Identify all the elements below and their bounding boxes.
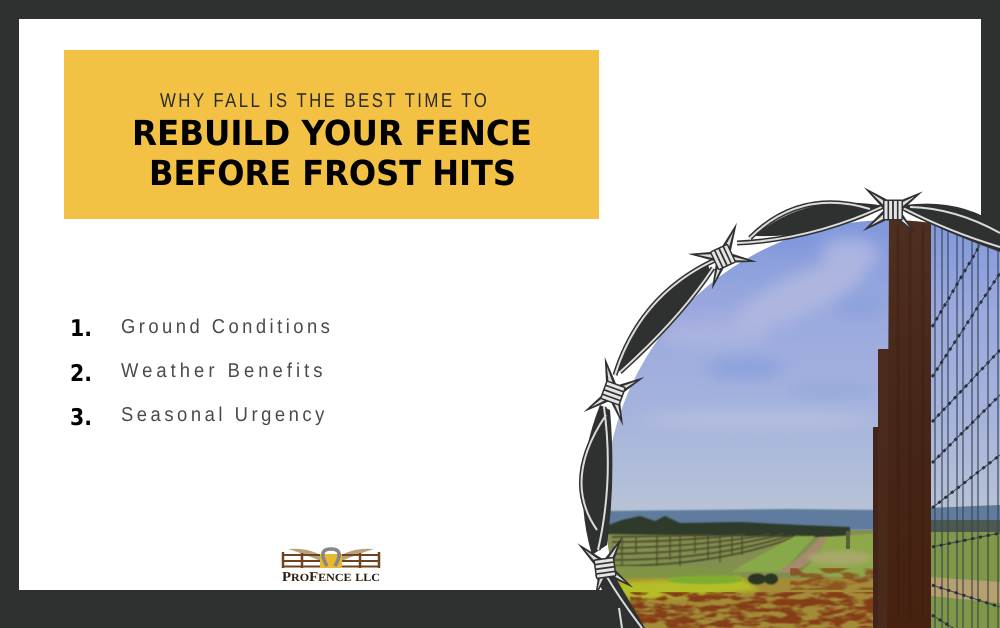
bright green patch <box>667 576 743 584</box>
item 3: Seasonal Urgency <box>121 404 324 426</box>
field base <box>608 530 873 578</box>
item 2: 2. <box>70 361 92 387</box>
distant hills <box>600 506 1000 530</box>
dirt strip behind fence <box>931 577 1000 603</box>
foreground base <box>600 578 880 628</box>
main fence post <box>887 215 931 628</box>
item 2: Weather Benefits <box>121 360 322 382</box>
pale meadow patch <box>808 551 872 565</box>
wire mesh <box>932 226 1000 628</box>
wire segment: upper left <box>615 260 715 375</box>
far fence post <box>873 427 879 628</box>
second fence post <box>878 349 888 628</box>
barb: upper left <box>687 220 758 292</box>
dark trees behind fence <box>931 520 1000 532</box>
right-hand field <box>797 533 873 578</box>
green strip <box>730 536 815 572</box>
tree line <box>600 516 850 537</box>
item 3 <box>70 404 324 431</box>
numbered list <box>70 316 330 431</box>
item 1: 1. <box>70 316 92 342</box>
logo icon: horns, fence, horseshoe <box>282 549 380 568</box>
item 1 <box>70 316 330 342</box>
title kicker: WHY FALL IS THE BEST TIME TO <box>160 90 487 112</box>
barb: lower left <box>573 534 637 600</box>
item 2 <box>70 360 322 387</box>
wire segment: top <box>737 203 885 243</box>
item 3: 3. <box>70 405 92 431</box>
yellow crops <box>618 577 760 600</box>
circular fence photo <box>600 215 1000 628</box>
item 1: Ground Conditions <box>121 316 330 338</box>
title line 1: REBUILD YOUR FENCE <box>132 114 532 154</box>
wire segment: top right <box>903 204 1000 252</box>
dirt track <box>777 537 827 573</box>
mottled soil <box>630 592 885 628</box>
logo wordmark: PROFENCE LLC <box>282 569 380 584</box>
hills behind fence <box>931 505 1000 520</box>
barb: left <box>580 355 647 428</box>
clouds <box>660 234 881 428</box>
vineyard rows <box>612 534 800 566</box>
wire segment: left <box>581 405 612 555</box>
title line 2: BEFORE FROST HITS <box>149 154 516 194</box>
sky <box>600 215 1000 535</box>
title banner <box>64 50 599 219</box>
barbed wire frame <box>573 182 1000 628</box>
wire segment: bottom <box>595 575 645 628</box>
barb: top <box>859 182 926 237</box>
logo: ProFence LLC <box>282 549 380 584</box>
pale grass band <box>612 566 740 578</box>
bush <box>748 574 778 584</box>
small fence post <box>846 531 850 549</box>
right field behind fence <box>931 530 1000 628</box>
mottled soil, upper band <box>790 568 873 590</box>
post grain <box>897 226 924 260</box>
